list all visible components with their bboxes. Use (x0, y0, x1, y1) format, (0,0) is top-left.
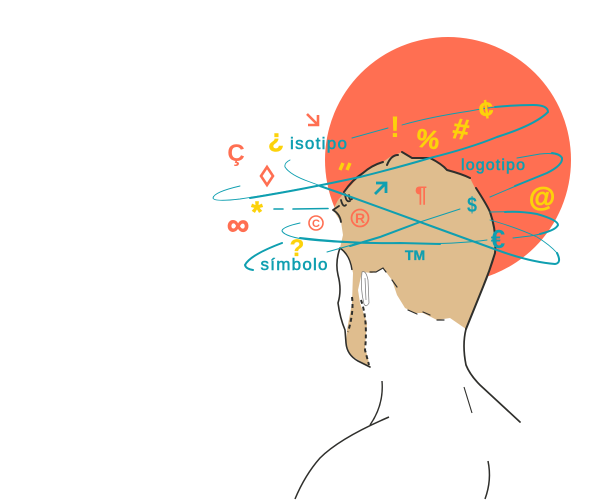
swirl D (282, 223, 487, 244)
swirl B (285, 160, 559, 264)
swirl A (213, 105, 548, 200)
hair and back of head outline (344, 152, 495, 329)
label: isotipo: isotipo (290, 134, 347, 153)
swirl C (245, 243, 282, 270)
symbol: hash: # (451, 113, 471, 147)
symbol: euro: € (491, 224, 505, 254)
swirl A tail (352, 128, 388, 138)
dashes (274, 208, 328, 210)
symbol: cent: ¢ (477, 93, 495, 125)
symbol: double quote (340, 163, 350, 170)
swirl G thick (505, 212, 558, 234)
symbol: copyright (309, 216, 323, 230)
symbol: exclamation: ! (390, 111, 400, 144)
swirl D thick middle (300, 238, 440, 244)
symbol: registered: R (355, 210, 365, 226)
symbol: lozenge (261, 167, 273, 185)
swirl E (327, 209, 460, 252)
symbol: inverted question: ¿ (268, 123, 284, 153)
symbol: at sign: @ (529, 182, 555, 212)
beard dots (348, 297, 369, 365)
icon: teal arrow up right (375, 183, 386, 194)
neck and shoulder lines (464, 329, 520, 422)
label: logotipo: logotipo (461, 157, 525, 174)
icon: coral arrow down right (307, 114, 318, 125)
swirl F thick (515, 153, 562, 186)
head illustration (295, 152, 520, 499)
head fill (333, 152, 495, 367)
symbol: copyright: C (312, 218, 320, 230)
ear (361, 272, 369, 306)
symbol: c cedilla: Ç (227, 140, 245, 167)
label: símbolo: símbolo (260, 255, 328, 274)
symbol: registered (352, 210, 368, 226)
teal orbit swirls (213, 105, 562, 270)
symbol: asterisk: * (251, 196, 263, 229)
swirl B thick middle (320, 186, 559, 264)
neck edge under hairline (370, 268, 444, 320)
symbol: dollar: $ (467, 194, 477, 217)
swirl E thick middle (350, 222, 420, 246)
symbol: trademark: TM (405, 247, 425, 263)
coral sun circle (325, 37, 571, 283)
swirl F (490, 154, 562, 197)
symbol: percent: % (414, 123, 442, 155)
swirl A thick middle (250, 105, 548, 198)
symbol: infinity: ∞ (227, 207, 249, 242)
face profile line (337, 248, 370, 367)
symbol: question: ? (290, 235, 304, 262)
swirl G (490, 212, 558, 238)
symbol: pilcrow: ¶ (415, 182, 427, 207)
forehead strands (333, 194, 352, 222)
